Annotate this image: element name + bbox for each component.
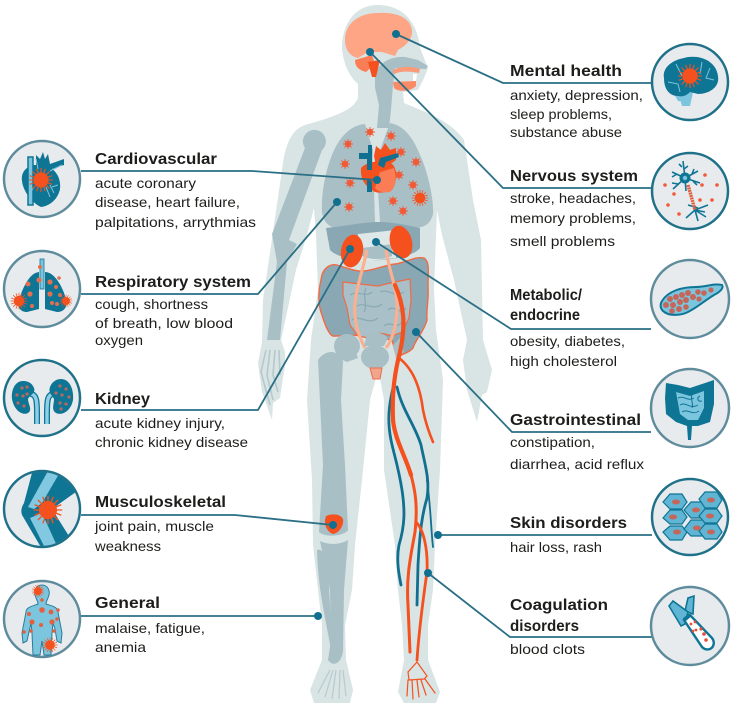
- heading: Skin disorders: [510, 515, 627, 532]
- right leg arteries: [393, 285, 435, 699]
- description: joint pain, muscle: [94, 518, 214, 534]
- heading: Metabolic/: [510, 287, 583, 304]
- skull airway: [375, 57, 428, 128]
- description: hair loss, rash: [510, 539, 602, 555]
- description: [95, 620, 205, 655]
- description: malaise, fatigue,: [95, 620, 205, 636]
- connector: skin: [438, 534, 652, 536]
- description: palpitations, arrythmias: [95, 214, 256, 230]
- description: acute coronary: [95, 175, 196, 191]
- heading: Respiratory system: [95, 274, 251, 291]
- cerebellum and brainstem: [355, 55, 380, 77]
- description: cough, shortness: [95, 296, 208, 312]
- connector: general: [81, 615, 318, 617]
- description: smell problems: [510, 233, 615, 249]
- brain: [345, 13, 412, 58]
- icon: heart: [4, 141, 80, 217]
- icon: kidneys: [4, 360, 80, 436]
- heading: Gastrointestinal: [510, 412, 641, 429]
- panel: mental health: [510, 44, 728, 140]
- description: acute kidney injury,: [95, 415, 225, 431]
- kidneys and pancreas: [338, 223, 416, 269]
- heading: Musculoskeletal: [95, 494, 226, 511]
- lung right: [378, 123, 433, 228]
- description: obesity, diabetes,: [510, 333, 625, 349]
- body silhouette: [258, 5, 492, 703]
- connector: respiratory: [81, 202, 337, 294]
- small intestine: [343, 279, 411, 338]
- knee inflammation: [325, 514, 343, 534]
- panel: nervous system: [510, 153, 728, 249]
- icon: neuron: [652, 153, 728, 229]
- description: substance abuse: [510, 124, 622, 140]
- connector: coagulation: [428, 573, 652, 637]
- heading: Coagulation: [510, 597, 608, 614]
- description: chronic kidney disease: [95, 434, 248, 450]
- foot bones: [318, 670, 346, 699]
- panel: gastrointestinal: [510, 369, 729, 472]
- panel: musculoskeletal: [4, 469, 226, 554]
- description: oxygen: [95, 332, 143, 348]
- right leg veins: [389, 387, 433, 605]
- panel: respiratory system: [4, 251, 251, 348]
- heading: Cardiovascular: [95, 151, 217, 168]
- icon: whole body: [4, 581, 80, 657]
- panel: kidney: [4, 360, 248, 450]
- pelvis: [334, 330, 404, 369]
- panel: general: [4, 581, 205, 657]
- connector: musculoskeletal: [81, 515, 333, 525]
- description: [510, 190, 636, 249]
- hand bones: [261, 350, 280, 405]
- panel: cardiovascular: [4, 141, 256, 230]
- ureters: [355, 250, 397, 348]
- heading line 2: disorders: [510, 618, 579, 635]
- bladder: [370, 368, 382, 379]
- left leg bones: [317, 352, 348, 664]
- description: memory problems,: [510, 210, 636, 226]
- description: [95, 175, 256, 230]
- icon: intestines: [651, 369, 729, 447]
- connector: mental health: [396, 34, 653, 83]
- icon: brain: [652, 44, 728, 120]
- icon: blood vessel with clots: [651, 587, 729, 665]
- icon: skin cells: [652, 479, 728, 555]
- panel: metabolic/endocrine: [510, 260, 729, 369]
- description: [510, 87, 643, 140]
- heading line 2: endocrine: [510, 307, 580, 324]
- description: weakness: [94, 538, 161, 554]
- panel: coagulation disorders: [510, 587, 729, 665]
- lung left: [322, 124, 375, 228]
- lung viruses: [340, 127, 428, 216]
- icon: knee joint: [4, 469, 80, 549]
- heading: Nervous system: [510, 168, 638, 185]
- description: of breath, low blood: [95, 315, 233, 331]
- heading: Mental health: [510, 63, 622, 80]
- connector lines: [81, 34, 653, 637]
- description: high cholesterol: [510, 353, 617, 369]
- heading: General: [95, 595, 160, 612]
- connector: kidney: [81, 249, 350, 410]
- description: sleep problems,: [510, 106, 612, 122]
- heart: [359, 143, 399, 193]
- description: disease, heart failure,: [95, 194, 240, 210]
- mouth: [393, 67, 420, 91]
- heading: Kidney: [95, 391, 150, 408]
- description: [94, 518, 214, 554]
- connector: cardiovascular: [81, 171, 377, 180]
- connector: metabolic: [376, 242, 651, 329]
- description: blood clots: [510, 641, 585, 657]
- description: anxiety, depression,: [510, 87, 643, 103]
- description: [510, 333, 625, 369]
- icon: lungs: [4, 251, 80, 327]
- icon: pancreas: [651, 260, 729, 338]
- description: constipation,: [510, 434, 595, 450]
- description: [95, 296, 233, 348]
- description: [95, 415, 248, 450]
- description: [510, 434, 644, 472]
- description: diarrhea, acid reflux: [510, 456, 644, 472]
- description: stroke, headaches,: [510, 190, 636, 206]
- connector: gastrointestinal: [416, 332, 651, 432]
- colon: [319, 258, 428, 358]
- abdomen: [326, 222, 420, 260]
- connector: nervous system: [370, 52, 653, 188]
- human body figure: [258, 5, 492, 703]
- connector end dots: [314, 30, 442, 620]
- description: anemia: [95, 639, 146, 655]
- panel: skin disorders: [510, 479, 728, 555]
- humerus left: [267, 130, 326, 340]
